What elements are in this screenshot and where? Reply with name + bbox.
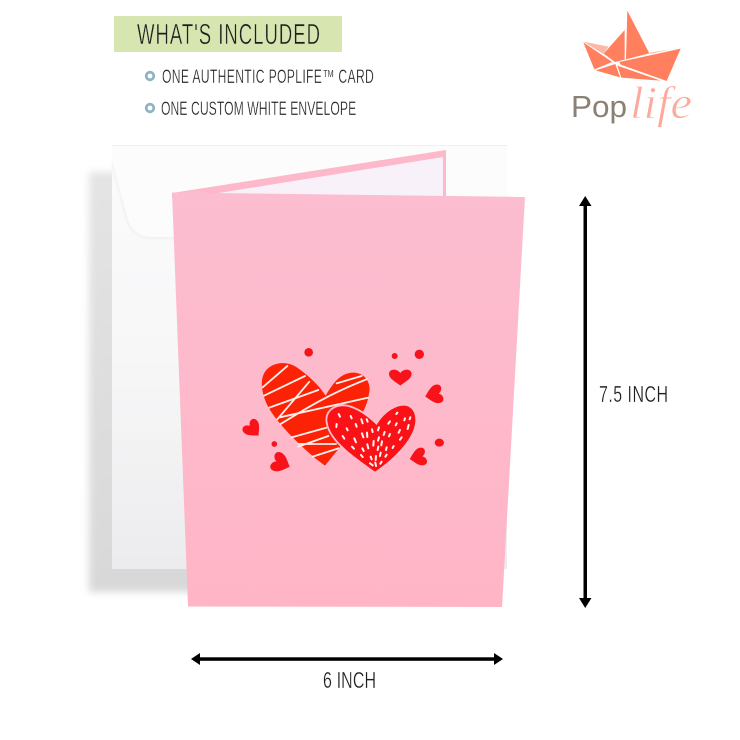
logo: poplife xyxy=(571,11,692,128)
arrow: height dimension xyxy=(579,196,592,608)
tiny hearts xyxy=(241,370,444,476)
label: 7.5 inch: 7.5 INCH xyxy=(599,382,668,408)
included items list xyxy=(146,68,374,120)
card back panel xyxy=(172,150,446,198)
arrow: width dimension xyxy=(191,653,503,665)
label: 6 inch: 6 INCH xyxy=(323,668,376,694)
envelope shadow xyxy=(89,172,199,592)
included items list: ONE AUTHENTIC POPLIFE™ CARD xyxy=(162,68,374,88)
scattered dots xyxy=(271,348,444,447)
seeded small heart xyxy=(327,406,415,472)
white envelope xyxy=(112,145,507,569)
card front cover xyxy=(172,192,525,607)
pop-up hearts artwork xyxy=(241,348,444,476)
logo: poplife: Pop xyxy=(571,89,627,124)
heading: what's included: WHAT'S INCLUDED xyxy=(137,19,320,51)
included items list: ONE CUSTOM WHITE ENVELOPE xyxy=(161,100,356,120)
striped large heart xyxy=(262,363,370,466)
envelope flap xyxy=(112,146,507,237)
logo: poplife: life xyxy=(630,77,692,128)
